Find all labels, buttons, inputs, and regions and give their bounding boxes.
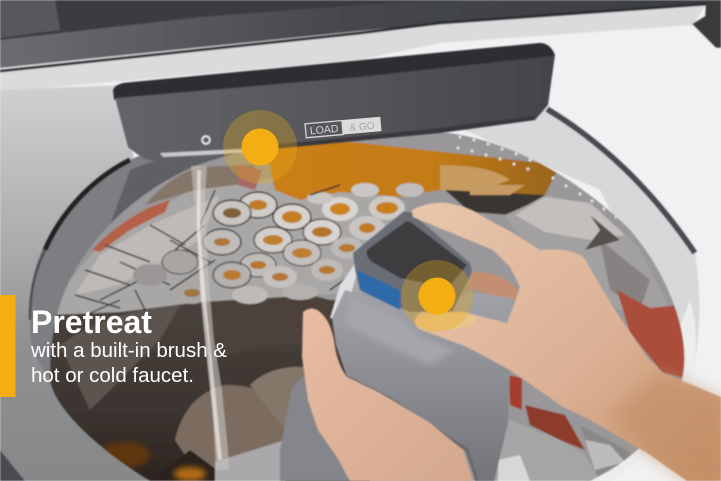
drum studs [456, 136, 618, 218]
thumb nail [415, 310, 477, 332]
lid [0, 0, 707, 68]
marker: dispenser [223, 110, 297, 184]
orange garment [268, 142, 557, 201]
middle finger [470, 272, 518, 300]
dark lower drum [40, 300, 370, 481]
caption body: with a built-in brush & [30, 339, 227, 362]
lower towel [280, 375, 360, 481]
quilt cups [133, 183, 424, 304]
main towel [332, 290, 513, 481]
LOAD & GO logo [305, 117, 382, 138]
red clothes right [617, 290, 690, 380]
icon: water drop button [202, 136, 210, 144]
red garment [92, 200, 170, 252]
dispenser panel [113, 43, 555, 162]
left hand [302, 308, 473, 481]
caption heading: Pretreat [31, 304, 152, 340]
right ring [460, 108, 699, 481]
right hand and arm [412, 203, 721, 481]
water stream [191, 166, 229, 470]
tan towels [175, 385, 286, 470]
accent bar [0, 295, 16, 397]
brush tool [353, 212, 472, 312]
drum and laundry [30, 125, 690, 481]
caption [30, 304, 227, 387]
marker: brush [401, 260, 473, 332]
grey quilted laundry [50, 170, 400, 315]
towel and hands [280, 203, 721, 481]
caption body: hot or cold faucet. [31, 364, 194, 387]
LOAD & GO logo: LOAD [309, 123, 339, 137]
grey clothes right [505, 195, 668, 320]
LOAD & GO logo: & GO [349, 121, 375, 134]
grey clothes bottom [495, 418, 600, 481]
light towel fold [330, 262, 358, 322]
right bracket [692, 0, 721, 48]
